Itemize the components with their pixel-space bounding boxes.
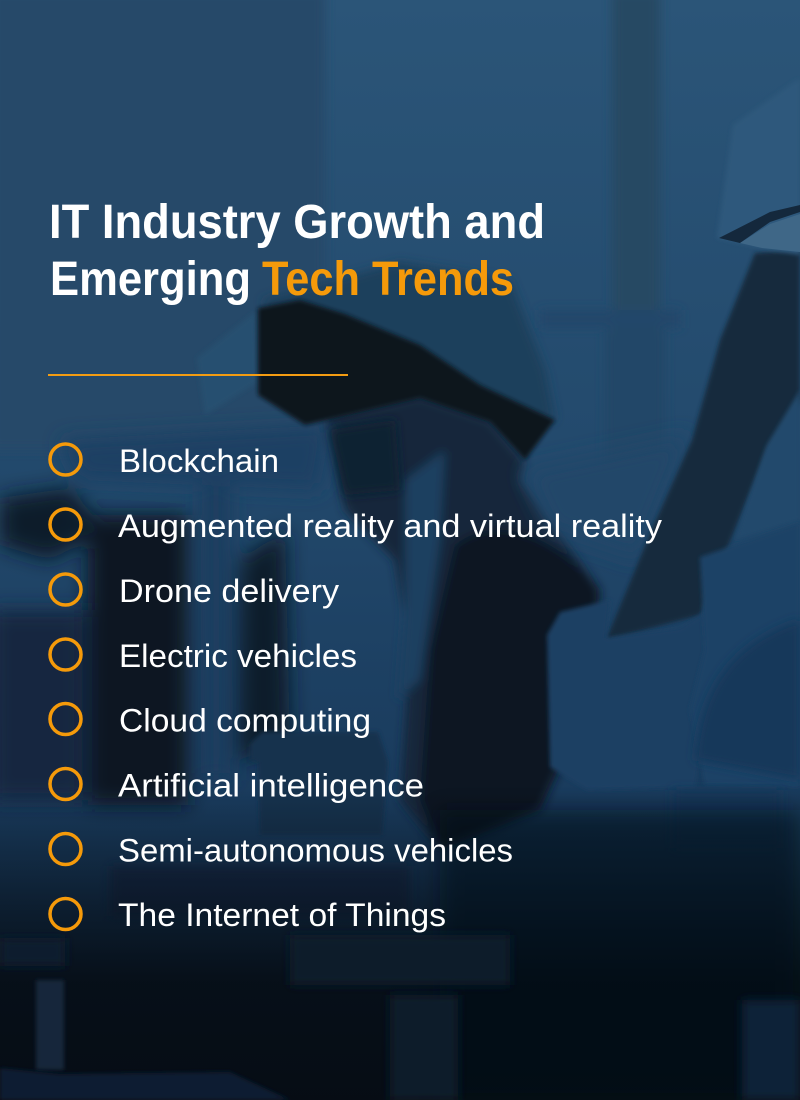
item: Augmented reality and virtual reality: Augmented reality and virtual reality <box>118 508 662 544</box>
left dark figure <box>88 515 188 805</box>
VR headset strap <box>258 300 555 460</box>
item: Artificial intelligence: Artificial intelligence <box>118 768 424 804</box>
raised arm <box>606 250 800 640</box>
item: Blockchain <box>50 443 279 479</box>
sleeve left <box>547 600 712 790</box>
title: Tech Trends <box>262 253 514 306</box>
VR headset front panel <box>197 312 258 415</box>
hair strands <box>398 450 445 700</box>
table foreground <box>110 866 410 916</box>
face <box>330 420 400 495</box>
VR controller <box>717 80 800 255</box>
light strip <box>202 450 230 780</box>
lighter shoulder and wall <box>522 435 690 560</box>
title: Emerging <box>50 253 251 306</box>
dark hair mass <box>420 530 600 850</box>
head and hair crown <box>262 262 555 420</box>
item: Blockchain: Blockchain <box>119 443 279 479</box>
left mid tone <box>0 610 85 800</box>
top left lit patch <box>60 425 330 490</box>
window strip <box>735 390 800 540</box>
divider line <box>48 374 348 376</box>
sleeve right <box>690 523 800 787</box>
title <box>49 196 545 306</box>
hair below strap <box>325 396 600 850</box>
top left dark blob <box>0 488 105 560</box>
bullet list <box>50 443 662 933</box>
central dark column <box>238 530 290 760</box>
item: Drone delivery: Drone delivery <box>119 573 339 609</box>
item: The Internet of Things: The Internet of Things <box>118 897 446 933</box>
item: Electric vehicles: Electric vehicles <box>119 638 357 674</box>
title: IT Industry Growth and <box>49 196 545 249</box>
item: Semi-autonomous vehicles: Semi-autonomous vehicles <box>118 832 513 868</box>
bottom fade <box>0 790 800 1100</box>
coffee cup <box>250 732 388 835</box>
item: Cloud computing: Cloud computing <box>119 702 371 738</box>
